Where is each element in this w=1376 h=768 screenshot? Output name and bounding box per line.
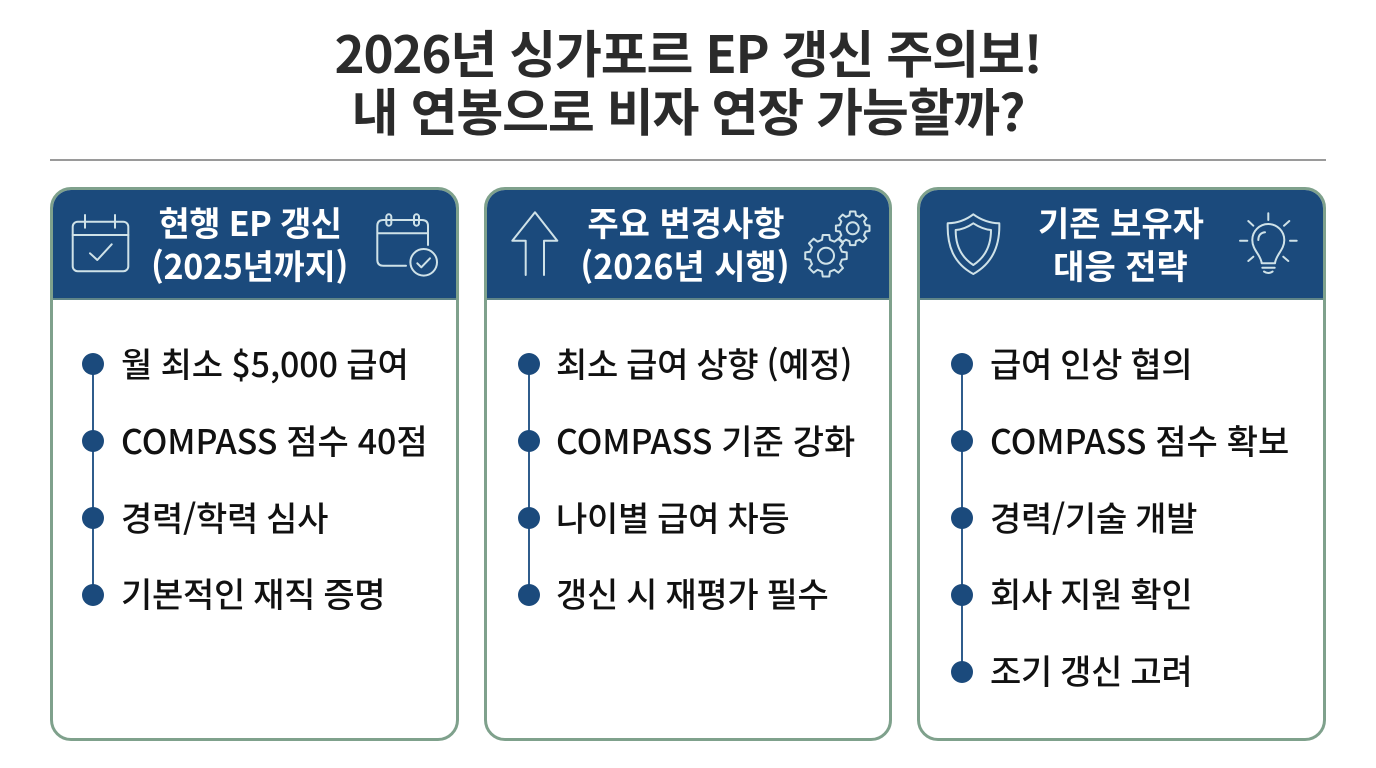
title line 2: 내 연봉으로 비자 연장 가능할까?: [352, 72, 1024, 146]
bullet: [951, 507, 973, 529]
list item: 경력/학력 심사: [121, 492, 328, 541]
icon: shield: [946, 213, 1000, 275]
heading: 주요 변경사항: [587, 197, 785, 246]
bullet: [951, 353, 973, 375]
list item: COMPASS 점수 40점: [121, 415, 428, 464]
heading second line: (2025년까지): [151, 240, 348, 289]
bullet: [951, 430, 973, 452]
heading: 기존 보유자: [1038, 197, 1204, 246]
list item: 경력/기술 개발: [990, 492, 1197, 541]
timeline line: [92, 364, 94, 595]
bullet: [951, 661, 973, 683]
icon: calendar with check badge: [376, 213, 438, 277]
list item: 월 최소 $5,000 급여: [121, 338, 409, 387]
heading: 현행 EP 갱신: [159, 197, 341, 246]
icon: calendar check: [72, 214, 130, 272]
panel header: [53, 190, 456, 300]
bullet: [82, 584, 104, 606]
heading second line: 대응 전략: [1053, 240, 1188, 289]
panel header: [487, 190, 889, 300]
bullet: [518, 584, 540, 606]
bullet: [518, 507, 540, 529]
list item: COMPASS 기준 강화: [556, 415, 855, 464]
panel: holder strategies: [917, 187, 1326, 741]
list item: 회사 지원 확인: [990, 568, 1192, 617]
timeline line: [961, 364, 963, 672]
list item: 나이별 급여 차등: [556, 492, 789, 541]
list item: 기본적인 재직 증명: [121, 568, 385, 617]
heading second line: (2026년 시행): [580, 240, 790, 289]
title: [335, 14, 1041, 146]
list item: 갱신 시 재평가 필수: [556, 568, 828, 617]
list item: 급여 인상 협의: [990, 338, 1192, 387]
panel: key changes: [484, 187, 892, 741]
list item: COMPASS 점수 확보: [990, 415, 1289, 464]
panel: current EP renewal: [50, 187, 459, 741]
icon: up arrow: [511, 211, 558, 276]
title line 1: 2026년 싱가포르 EP 갱신 주의보!: [335, 14, 1041, 88]
bullet: [518, 353, 540, 375]
bullet: [951, 584, 973, 606]
bullet: [518, 430, 540, 452]
bullet: [82, 353, 104, 375]
icon: light bulb: [1239, 212, 1298, 274]
timeline line: [528, 364, 530, 595]
icon: gears: [804, 210, 870, 278]
list item: 최소 급여 상향 (예정): [556, 338, 852, 387]
panel header: [920, 190, 1323, 300]
bullet: [82, 507, 104, 529]
bullet: [82, 430, 104, 452]
list item: 조기 갱신 고려: [990, 645, 1192, 694]
